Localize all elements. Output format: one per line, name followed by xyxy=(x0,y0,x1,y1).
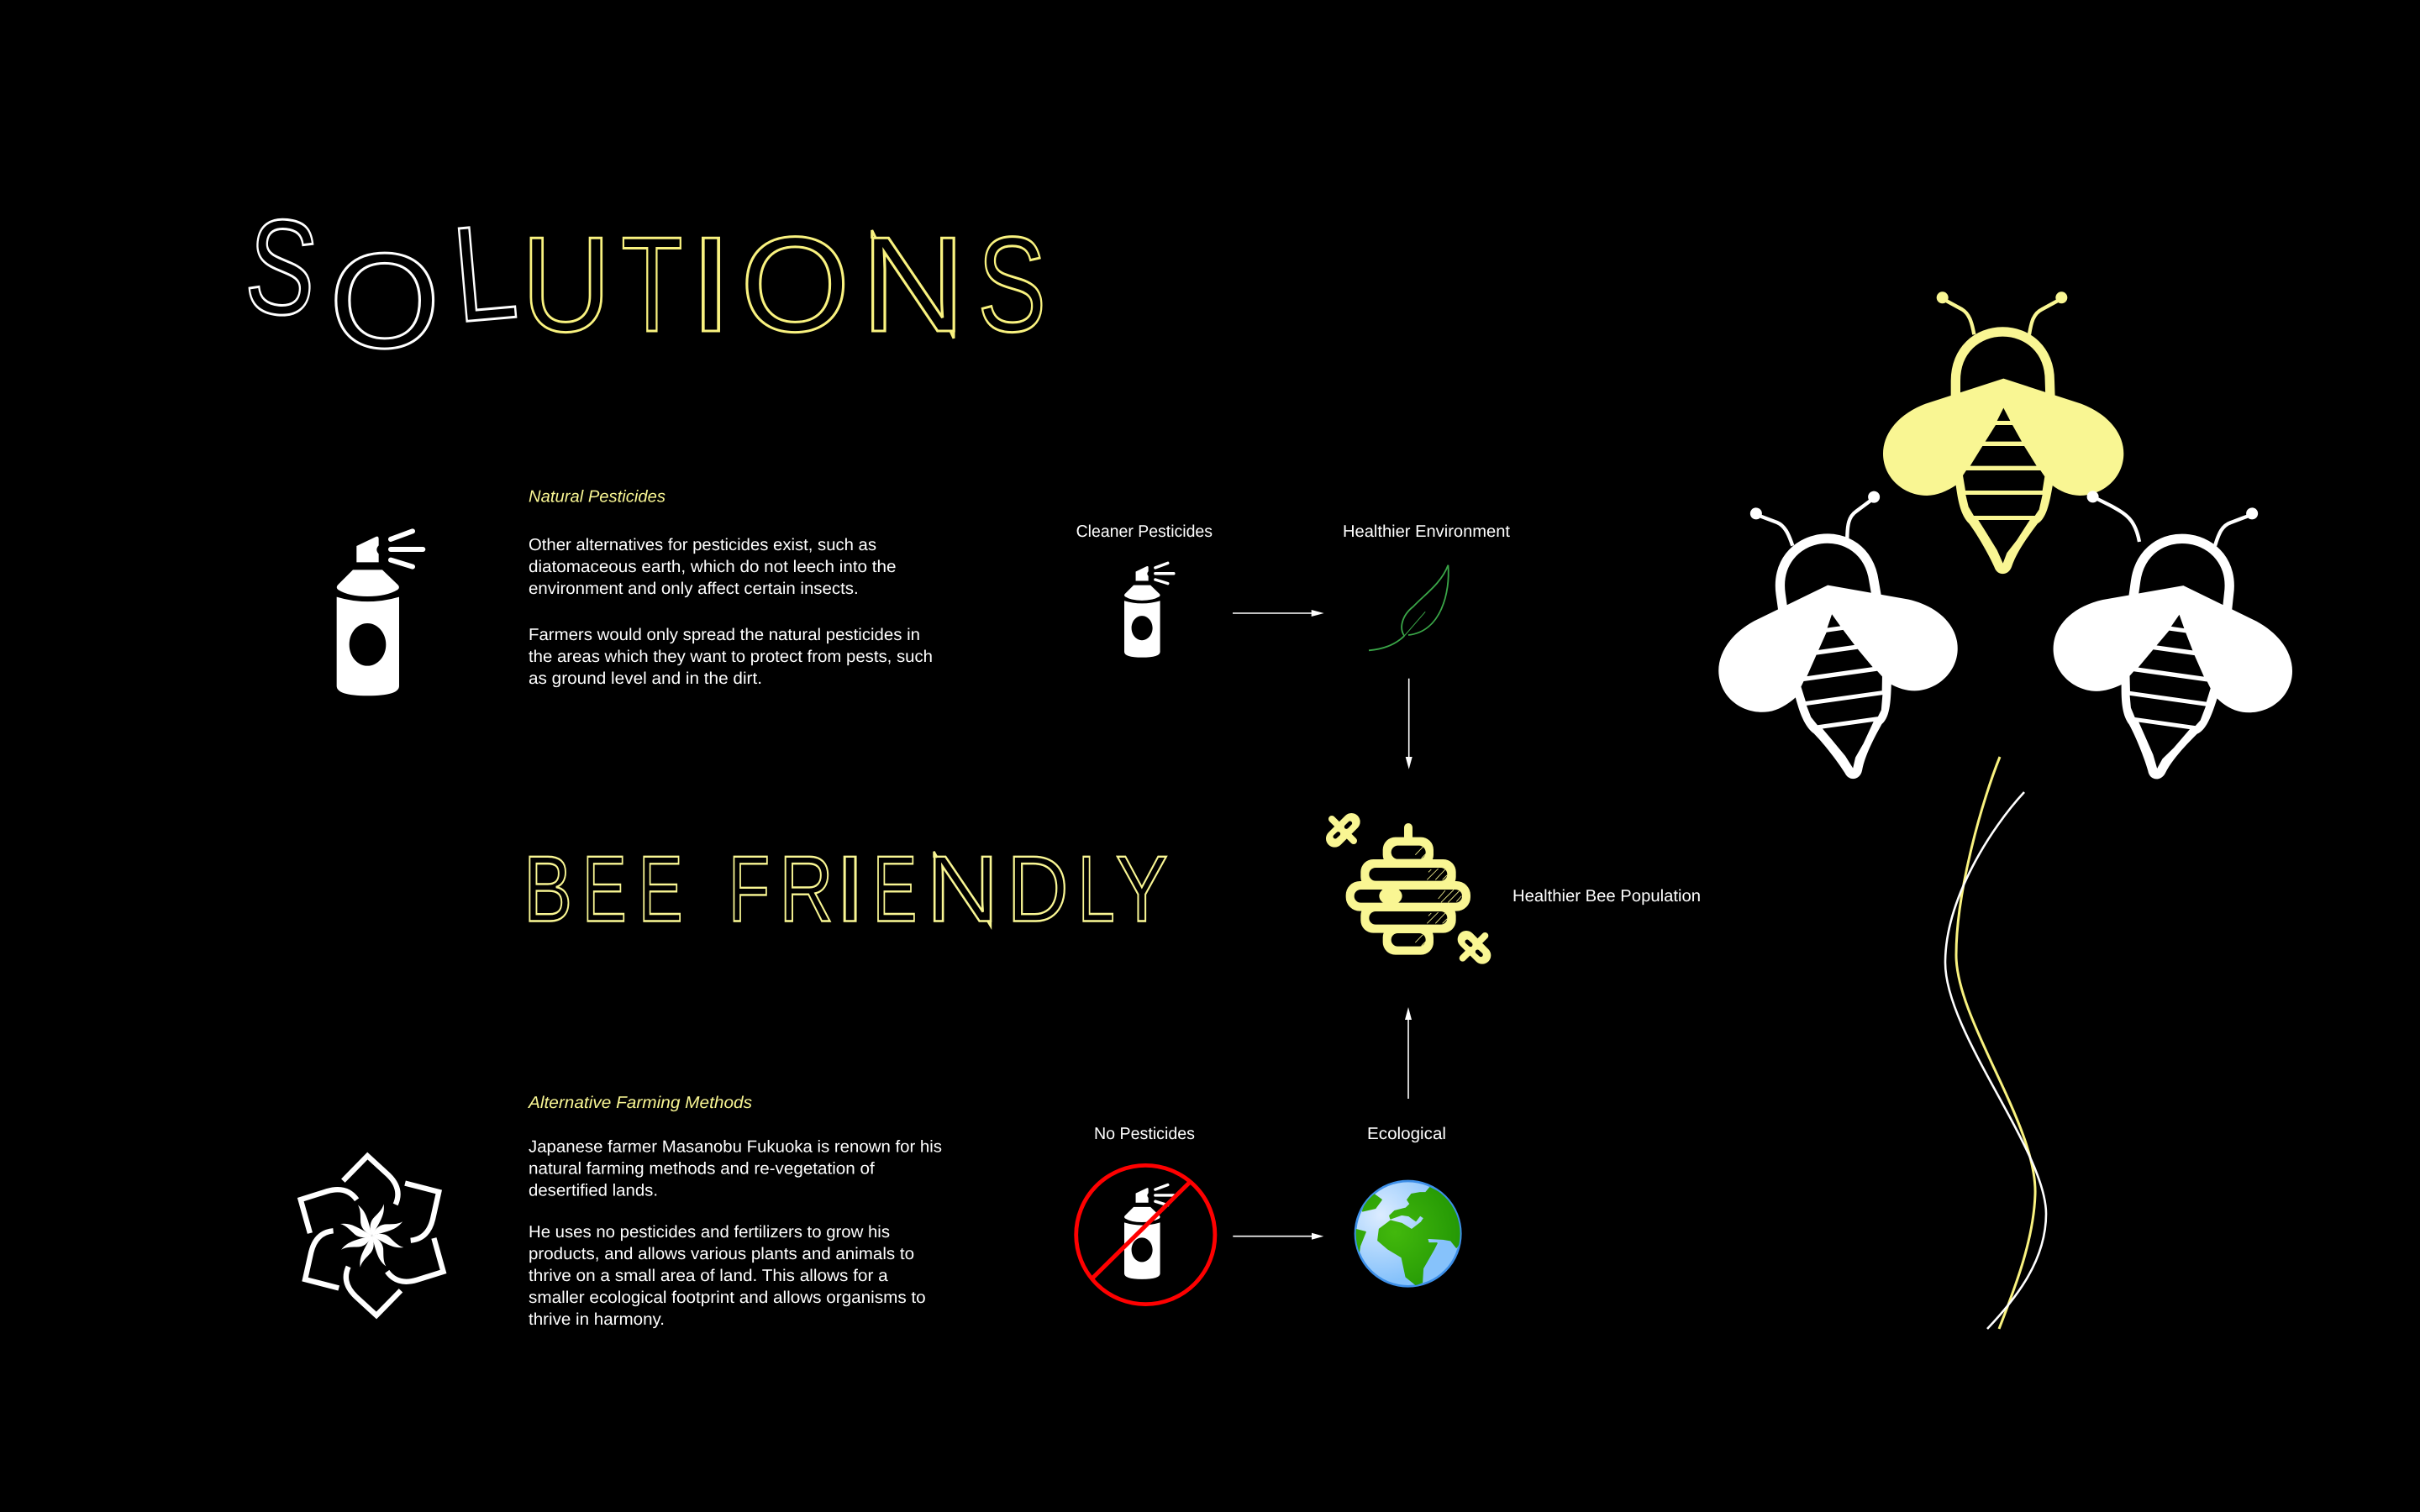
text block: alternative farming methods: thrive in harmony. xyxy=(529,1310,665,1329)
illustration: left white bee xyxy=(1697,482,1974,795)
text block: alternative farming methods: smaller ecological footprint and allows organisms to xyxy=(529,1289,926,1307)
icon: no pesticides sign xyxy=(1076,1165,1215,1305)
heading: BEE FRIENDLY: I xyxy=(834,837,866,941)
text block: alternative farming methods: Alternative Farming Methods xyxy=(528,1094,752,1112)
heading: BEE FRIENDLY: N xyxy=(926,837,999,941)
heading: BEE FRIENDLY: B xyxy=(523,837,572,941)
text block: natural pesticides: Other alternatives for pesticides exist, such as xyxy=(529,536,876,554)
title: SOLUTIONS: U xyxy=(521,209,611,360)
text block: alternative farming methods: products, and allows various plants and animals to xyxy=(529,1245,914,1263)
heading: BEE FRIENDLY: R xyxy=(779,837,834,941)
icon: green leaf xyxy=(1369,565,1449,650)
illustration: flight trails xyxy=(1945,757,2046,1329)
title: SOLUTIONS: N xyxy=(860,209,965,360)
icon: globe xyxy=(1355,1181,1465,1286)
text block: alternative farming methods xyxy=(528,1094,942,1329)
arrow: environment to bee population xyxy=(1406,679,1413,769)
text block: alternative farming methods: Japanese farmer Masanobu Fukuoka is renown for his xyxy=(529,1138,942,1157)
text block: alternative farming methods: natural farming methods and re-vegetation of xyxy=(529,1160,875,1179)
heading: BEE FRIENDLY: E xyxy=(582,837,627,941)
label: healthier environment: Healthier Environment xyxy=(1343,522,1510,541)
icon: beehive with bees xyxy=(1332,819,1485,958)
arrow: no pesticides to ecological xyxy=(1233,1233,1323,1240)
text block: alternative farming methods: He uses no pesticides and fertilizers to grow his xyxy=(529,1223,890,1242)
text block: natural pesticides xyxy=(529,488,933,688)
label: no pesticides: No Pesticides xyxy=(1094,1125,1195,1143)
text block: natural pesticides: as ground level and in the dirt. xyxy=(529,669,762,688)
icon: small spray can xyxy=(1124,563,1174,658)
title: SOLUTIONS: T xyxy=(621,209,683,360)
heading: BEE FRIENDLY: E xyxy=(639,837,683,941)
title: SOLUTIONS xyxy=(239,189,1046,376)
label: healthier bee population: Healthier Bee Population xyxy=(1512,887,1701,906)
label: ecological: Ecological xyxy=(1367,1125,1446,1143)
illustration: right white bee xyxy=(2037,483,2314,795)
text block: natural pesticides: diatomaceous earth, which do not leech into the xyxy=(529,558,896,576)
illustration: yellow bee xyxy=(1883,291,2123,574)
text block: natural pesticides: Natural Pesticides xyxy=(529,488,666,507)
title: SOLUTIONS: S xyxy=(977,209,1046,360)
label: cleaner pesticides: Cleaner Pesticides xyxy=(1076,522,1213,541)
title: SOLUTIONS: L xyxy=(447,195,523,351)
heading: BEE FRIENDLY: L xyxy=(1078,837,1115,941)
heading: BEE FRIENDLY: D xyxy=(1007,837,1069,941)
heading: BEE FRIENDLY: F xyxy=(729,837,770,941)
title: SOLUTIONS: O xyxy=(740,209,850,360)
text block: natural pesticides: environment and only affect certain insects. xyxy=(529,580,859,598)
text block: alternative farming methods: desertified lands. xyxy=(529,1182,658,1200)
text block: alternative farming methods: thrive on a small area of land. This allows for a xyxy=(529,1267,889,1285)
text block: natural pesticides: the areas which they want to protect from pests, such xyxy=(529,648,933,666)
text block: natural pesticides: Farmers would only spread the natural pesticides in xyxy=(529,626,920,644)
title: SOLUTIONS: O xyxy=(329,225,440,376)
arrow: pesticides to environment xyxy=(1233,610,1324,617)
title: SOLUTIONS: I xyxy=(688,209,734,360)
icon: flower xyxy=(288,1156,455,1315)
heading: BEE FRIENDLY xyxy=(523,837,1168,941)
heading: BEE FRIENDLY: E xyxy=(872,837,917,941)
icon: spray can xyxy=(337,531,423,696)
arrow: ecological to bee population xyxy=(1405,1007,1412,1099)
heading: BEE FRIENDLY: Y xyxy=(1116,837,1168,941)
title: SOLUTIONS: S xyxy=(239,189,324,346)
